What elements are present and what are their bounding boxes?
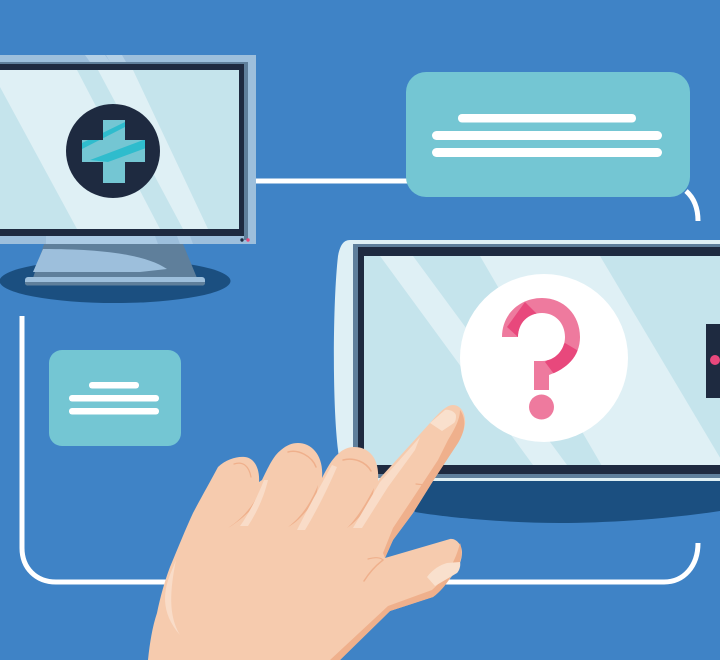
desktop monitor: [0, 55, 256, 303]
monitor base: [25, 277, 205, 286]
fingernail index: [430, 410, 456, 431]
tablet screen: [364, 256, 720, 466]
tablet body: [334, 240, 720, 481]
monitor frame: [0, 55, 256, 244]
white circle: [460, 274, 628, 442]
tablet: [334, 240, 720, 523]
finger shading: [383, 410, 464, 558]
status lights: [240, 238, 244, 242]
monitor screen: [0, 70, 239, 229]
medical cross icon: [66, 104, 160, 198]
monitor stand: [33, 244, 197, 278]
connector lines: [22, 181, 698, 582]
hand silhouette: [148, 405, 465, 660]
monitor shadow: [0, 259, 230, 303]
skin highlights and creases: [234, 451, 425, 581]
fingernail thumb: [427, 562, 460, 586]
question mark: [502, 298, 582, 420]
small text bubble: [49, 350, 181, 446]
hand: [148, 405, 465, 660]
tablet shadow: [400, 480, 720, 523]
large text bubble: [406, 72, 690, 197]
side button panel: [706, 324, 720, 398]
